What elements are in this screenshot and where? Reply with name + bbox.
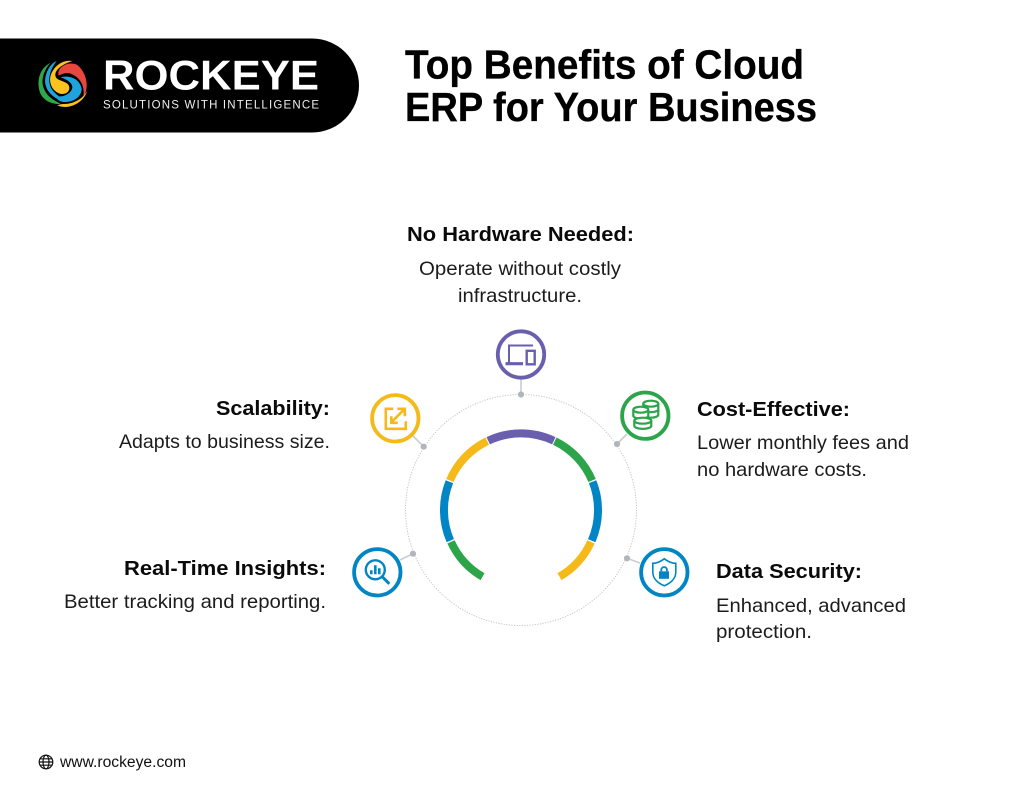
icon: swirl logo (38, 59, 89, 110)
website address: www.rockeye.com (59, 754, 186, 771)
title (405, 42, 817, 130)
text block: scalability: Adapts to business size. (119, 431, 330, 453)
text block: scalability: Scalability: (216, 397, 330, 420)
text block: cost-effective: Cost-Effective: (697, 398, 850, 421)
title: Top Benefits of Cloud (405, 42, 804, 88)
text block: data security: Data Security: (716, 560, 862, 583)
connectors and ring nodes (400, 379, 640, 563)
icon: globe (39, 755, 53, 769)
logo wordmark: ROCKEYE (103, 52, 319, 98)
logo banner (0, 38, 359, 132)
text block: data security (716, 560, 906, 643)
dotted outer ring (406, 394, 636, 626)
text block: no hardware needed: Operate without costly (419, 258, 621, 280)
text block: cost-effective (697, 398, 909, 481)
text block: no hardware needed: infrastructure. (458, 285, 582, 307)
icon: security shield (641, 549, 688, 596)
text block: real-time insights (64, 557, 326, 613)
segmented inner ring chart (444, 433, 598, 577)
icon: coin stacks (622, 392, 668, 439)
text block: cost-effective: no hardware costs. (697, 459, 867, 481)
text block: cost-effective: Lower monthly fees and (697, 432, 909, 454)
text block: real-time insights: Real-Time Insights: (124, 557, 326, 580)
text block: data security: Enhanced, advanced (716, 595, 906, 617)
text block: scalability (119, 397, 330, 453)
text block: no hardware needed (407, 223, 634, 307)
text block: data security: protection. (716, 621, 812, 643)
text block: real-time insights: Better tracking and reporting. (64, 591, 326, 613)
text block: no hardware needed: No Hardware Needed: (407, 223, 634, 246)
icon: magnifier chart (354, 549, 400, 596)
icon: laptop and phone (498, 331, 544, 378)
logo tagline: SOLUTIONS WITH INTELLIGENCE (103, 100, 319, 112)
icon: expand arrow (372, 395, 418, 442)
footer website (39, 754, 186, 771)
title: ERP for Your Business (405, 84, 817, 130)
